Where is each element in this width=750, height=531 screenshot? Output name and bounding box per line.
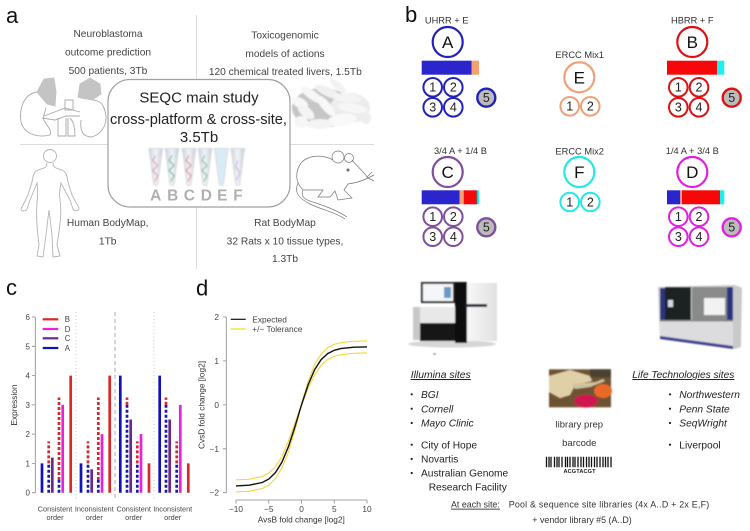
icon: barcode: ACGTACGT: [564, 469, 596, 475]
y tick labels: 5: [26, 342, 31, 351]
sample E: [555, 50, 604, 116]
panel label a: a: [6, 3, 19, 28]
panel label c: c: [6, 275, 17, 300]
legend: B: [65, 315, 70, 324]
group labels: Consistent: [38, 504, 72, 514]
legend: +/− Tolerance: [252, 324, 303, 334]
icon: Illumina sequencer: [408, 282, 497, 354]
legend: Expected: [252, 314, 287, 324]
text: human bodymap: Human BodyMap,: [67, 218, 148, 229]
icon: kidneys: [21, 78, 106, 137]
icon: rat: [296, 151, 374, 219]
tolerance curves: [236, 341, 367, 492]
sample F: 1: [566, 195, 573, 209]
tube letters: F: [233, 188, 243, 205]
sample B: 3: [675, 101, 682, 115]
list: Illumina sites: Novartis: [421, 454, 458, 466]
sample E: 1: [566, 100, 573, 114]
sample E: E: [574, 68, 585, 87]
legend: [231, 314, 303, 334]
y tick labels: 3: [26, 401, 31, 410]
sample C: 3/4 A + 1/4 B: [434, 146, 487, 156]
sample B: [667, 16, 741, 117]
y tick labels: 2: [214, 312, 219, 322]
list: Life Technologies sites: SeqWright: [679, 419, 728, 430]
sample A: 2: [450, 81, 457, 95]
sample B: 2: [696, 81, 703, 95]
x tick labels: 5: [332, 504, 337, 514]
sample B: 4: [696, 101, 703, 115]
sample C: 4: [450, 230, 457, 244]
sample D: 4: [696, 230, 703, 244]
bars: [42, 376, 188, 493]
legend: [43, 315, 71, 353]
group labels: [38, 504, 192, 522]
panel b: sample design: [405, 2, 741, 246]
text: library prep: library prep: [556, 420, 603, 431]
group labels: order: [46, 513, 64, 522]
x axis title: AvsB fold change [log2]: [258, 515, 345, 525]
sample A: 3: [429, 101, 436, 115]
y tick labels: 1: [26, 459, 31, 468]
text: toxicogenomic: Toxicogenomic: [251, 30, 319, 42]
box heading: [110, 90, 287, 146]
text: at each site: Pool & sequence site libraries (4x A..D + 2x E,F): [509, 500, 709, 510]
photo: library preparation: [549, 369, 612, 408]
central box: SEQC main study: [108, 80, 290, 207]
legend: A: [65, 344, 71, 353]
list: Illumina sites: Mayo Clinic: [421, 419, 474, 430]
list: Illumina sites: Australian Genome: [421, 469, 509, 480]
tube letters: D: [201, 188, 212, 205]
sample C: C: [442, 163, 454, 182]
text: neuroblastoma: [65, 29, 151, 77]
sample A: A: [442, 33, 454, 52]
sample A: 4: [450, 101, 457, 115]
list: Life Technologies sites: Northwestern: [679, 390, 740, 401]
sample B: HBRR + F: [671, 16, 714, 26]
panel: sequencing sites: [408, 282, 742, 525]
sample B: 1: [675, 81, 682, 95]
sample F: [555, 146, 604, 211]
y tick labels: 0: [214, 400, 219, 410]
icon: human body: [21, 150, 79, 257]
tube letters: [150, 188, 243, 205]
list: Illumina sites: City of Hope: [421, 440, 477, 451]
text: rat bodymap: 32 Rats x 10 tissue types,: [227, 236, 343, 248]
sample F: ERCC Mix2: [555, 146, 604, 156]
panel label b: b: [405, 2, 417, 27]
sample A: UHRR + E: [425, 16, 469, 26]
list: Illumina sites: [411, 390, 509, 494]
y axis title: CvsD fold change [log2]: [196, 361, 206, 449]
sample B: B: [687, 33, 698, 52]
list: Life Technologies sites: Penn State: [679, 404, 730, 415]
box heading: SEQC main study: [139, 90, 259, 106]
sample D: [666, 146, 741, 246]
y tick labels: −1: [210, 444, 219, 454]
panel d: fold change curve: [196, 276, 372, 525]
tube letters: A: [150, 188, 161, 205]
axes: [223, 317, 367, 504]
text: toxicogenomic: [209, 30, 362, 78]
panel label d: d: [196, 276, 208, 300]
legend: C: [65, 334, 71, 343]
list: Illumina sites: Research Facility: [429, 483, 508, 494]
panel c: expression bar chart: [6, 275, 192, 522]
y tick labels: 1: [214, 356, 219, 366]
sample C: 2: [450, 210, 457, 224]
sample D: 1/4 A + 3/4 B: [666, 146, 719, 156]
sample E: ERCC Mix1: [555, 50, 604, 60]
sample C: 3: [429, 230, 436, 244]
text: barcode: barcode: [562, 438, 596, 449]
list: Illumina sites: Cornell: [421, 404, 454, 415]
sample A: 1: [429, 81, 436, 95]
tube letters: B: [167, 188, 178, 205]
text: human bodymap: [67, 218, 148, 247]
text: human bodymap: 1Tb: [99, 236, 117, 247]
tube letters: C: [184, 188, 195, 205]
list: Life Technologies sites: [669, 390, 740, 451]
list: Life Technologies sites: Liverpool: [679, 440, 721, 451]
heading: Illumina sites: Illumina sites: [411, 370, 471, 381]
x tick labels: 0: [299, 504, 304, 514]
sample C: 5: [483, 221, 490, 235]
x tick labels: −10: [229, 504, 243, 514]
text: neuroblastoma: 500 patients, 3Tb: [69, 66, 148, 77]
sample F: 2: [587, 195, 594, 209]
sample D: 1: [675, 210, 682, 224]
x tick labels: [229, 504, 372, 514]
sample D: 5: [728, 221, 735, 235]
text: rat bodymap: Rat BodyMap: [254, 218, 316, 229]
group labels: order: [125, 513, 143, 522]
text: at each site: [451, 500, 709, 525]
text: toxicogenomic: 120 chemical treated livers, 1.5Tb: [209, 67, 362, 78]
sample D: 3: [675, 230, 682, 244]
group labels: Inconsistent: [153, 504, 192, 514]
sample F: F: [574, 163, 584, 182]
sample D: D: [686, 163, 698, 182]
sample C: [422, 146, 495, 246]
y tick labels: 4: [26, 372, 31, 381]
group labels: order: [86, 513, 103, 522]
text: rat bodymap: 1.3Tb: [272, 254, 298, 265]
y axis: [32, 317, 35, 493]
panel a: SEQC study overview: [6, 3, 374, 269]
sample B: 5: [728, 91, 735, 105]
y tick labels: [26, 313, 31, 498]
group labels: Consistent: [116, 504, 151, 514]
y tick labels: 6: [26, 313, 31, 322]
x tick labels: 10: [362, 504, 372, 514]
text: neuroblastoma: Neuroblastoma: [73, 29, 143, 40]
icon: Life Technologies sequencer: [658, 285, 742, 349]
x tick labels: −5: [264, 504, 274, 514]
text: toxicogenomic: models of actions: [245, 49, 325, 60]
icon: barcode: [546, 457, 611, 475]
icon: pills: [290, 77, 371, 129]
y tick labels: −2: [210, 488, 219, 498]
sample A: 5: [483, 91, 490, 105]
group labels: order: [164, 513, 182, 522]
sample D: 2: [696, 210, 703, 224]
text: neuroblastoma: outcome prediction: [65, 48, 151, 58]
sample E: 2: [587, 100, 594, 114]
box heading: 3.5Tb: [180, 129, 218, 146]
group labels: Inconsistent: [75, 504, 114, 514]
y tick labels: 2: [26, 430, 31, 439]
y axis title: Expression: [9, 384, 19, 426]
y tick labels: 0: [26, 489, 31, 498]
heading: Life Technologies sites: Life Technologies sites: [632, 370, 734, 381]
tube letters: E: [217, 188, 227, 205]
list: Illumina sites: BGI: [421, 390, 439, 401]
legend: D: [65, 325, 71, 334]
box heading: cross-platform & cross-site,: [110, 111, 287, 128]
text: at each site: + vendor library #5 (A..D): [532, 515, 632, 525]
icon: sample tubes: [149, 148, 245, 186]
expected curve: [236, 347, 367, 486]
text: rat bodymap: [227, 218, 343, 265]
sample A: [422, 16, 495, 117]
sample C: 1: [429, 210, 436, 224]
y tick labels: [210, 312, 219, 498]
text: at each site: At each site:: [451, 500, 500, 510]
